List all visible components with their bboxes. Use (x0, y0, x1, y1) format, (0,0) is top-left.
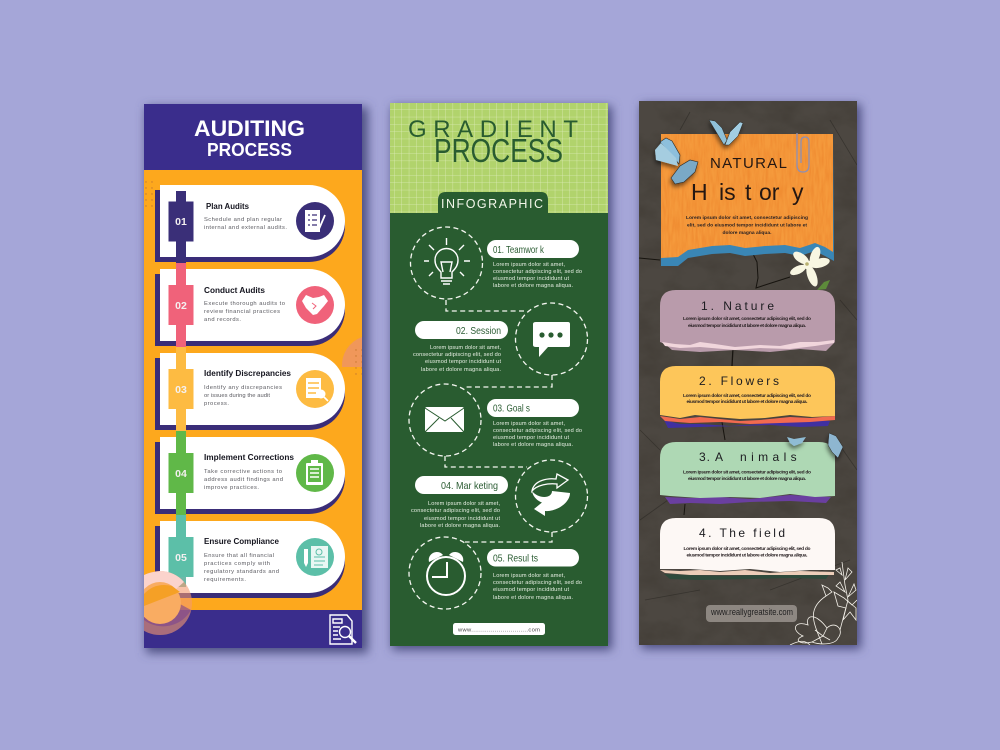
dots decoration (144, 177, 156, 211)
text (493, 573, 582, 601)
step 05 text: requirements. (204, 577, 246, 583)
step 05 (168, 536, 334, 587)
step 01 (168, 201, 334, 242)
website pill: www.............................com (457, 628, 540, 634)
intro text (686, 215, 808, 236)
card 2 (155, 269, 345, 346)
card 3: animals: 3. (699, 450, 711, 464)
card text: eiusmod tempor incididunt ut labore et dolore magna aliqua. (688, 323, 807, 329)
text: consectetur adipiscing elit, sed do (493, 580, 582, 586)
text: labore et dolore magna aliqua. (420, 523, 500, 529)
card 3: animals: A (715, 450, 723, 464)
step 01 text: Schedule and plan regular (204, 217, 282, 223)
step 04 text: improve practices. (204, 485, 259, 491)
stone background (639, 101, 857, 645)
step 04 text: Take corrective actions to (204, 469, 282, 475)
step 01: 01 (175, 216, 187, 228)
card text: Lorem ipsum dolor sit amet, consectetur adipiscing elit, sed do (683, 393, 811, 399)
text (493, 262, 582, 289)
icon: light bulb (424, 238, 470, 284)
text (413, 345, 501, 373)
panel background (144, 104, 362, 648)
step 04: marketing: 04. Mar keting (441, 480, 498, 492)
card text (684, 546, 810, 558)
title (691, 155, 804, 205)
step 03 text: or issues during the audit (204, 393, 270, 399)
step 03: goals (409, 384, 582, 456)
card text: eiusmod tempor incididunt ut labore et dolore magna aliqua. (686, 399, 808, 405)
icon: envelope (425, 407, 464, 432)
text: labore et dolore magna aliqua. (421, 367, 501, 373)
pill (487, 240, 579, 258)
decoration: right semicircle (342, 337, 362, 375)
text: Lorem ipsum dolor sit amet, (428, 501, 500, 507)
text: eiusmod tempor incididunt ut (493, 587, 569, 593)
step 05 text (204, 553, 279, 583)
panel: natural history (639, 101, 861, 649)
infographic tab (438, 192, 548, 213)
step 04 (168, 452, 334, 493)
card text (683, 316, 811, 329)
icon: audit sheet (296, 370, 334, 408)
title: or (759, 179, 780, 205)
card 1: nature (660, 290, 835, 352)
floral outline (790, 562, 857, 645)
deep cracks (639, 252, 790, 515)
text: eiusmod tempor incididunt ut (425, 359, 501, 365)
card text (683, 470, 811, 482)
text: eiusmod tempor incididunt ut (493, 276, 569, 282)
step 02: session: 02. Session (456, 325, 501, 337)
step 05: results (409, 537, 582, 609)
step 04 text (204, 469, 283, 491)
step 01: teamwork: 01. Teamwor k (493, 244, 545, 256)
orange note (661, 134, 834, 266)
step 01: teamwork (410, 227, 582, 299)
step 02 heading: Conduct Audits (204, 285, 265, 295)
pill (415, 476, 508, 494)
card 2: flowers (660, 366, 835, 428)
step 03 heading: Identify Discrepancies (204, 368, 291, 378)
text: labore et dolore magna aliqua. (493, 442, 573, 448)
butterflies on card 3 (787, 433, 843, 458)
step 02 (168, 285, 334, 325)
card 3: animals (660, 442, 835, 504)
website pill: www.reallygreatsite.com (710, 607, 793, 618)
card 5 (155, 521, 345, 598)
text: Lorem ipsum dolor sit amet, (493, 262, 565, 268)
grid header (390, 103, 608, 213)
title (194, 116, 305, 160)
infographic tab: INFOGRAPHIC (441, 197, 543, 211)
step 01 heading: Plan Audits (206, 201, 249, 211)
card text: eiusmod tempor incididunt ut labore et dolore magna aliqua. (686, 552, 808, 558)
card text: eiusmod tempor incididunt ut labore et dolore magna aliqua. (688, 476, 807, 482)
step 01 text: internal and external audits. (204, 225, 287, 231)
title: is (719, 179, 736, 205)
intro text: Lorem ipsum dolor sit amet, consectetur adipiscing (686, 215, 808, 221)
text (493, 421, 582, 448)
step 05: 05 (175, 552, 187, 564)
card 4: the field (660, 518, 835, 580)
step 05 text: Ensure that all financial (204, 553, 274, 559)
heading band (144, 104, 362, 170)
step 04: marketing (411, 460, 588, 532)
card 4: the field: 4. The field (699, 526, 785, 540)
title: AUDITING (194, 116, 305, 141)
icon: alarm clock (427, 552, 465, 595)
panel: gradient process (390, 103, 612, 650)
step 04: 04 (175, 468, 187, 480)
text: Lorem ipsum dolor sit amet, (493, 573, 565, 579)
website pill (706, 605, 797, 622)
step 02 text: Execute thorough audits to (204, 301, 285, 307)
title: y (792, 179, 804, 205)
cracks (640, 112, 857, 600)
step 02: 02 (175, 300, 187, 312)
icon: handshake (296, 286, 334, 324)
icon: leaf (817, 280, 830, 290)
step 02 text (204, 301, 285, 323)
text: eiusmod tempor incididunt ut (493, 435, 569, 441)
step 01 text (204, 217, 287, 231)
step 04 heading: Implement Corrections (204, 452, 294, 462)
card 3 (155, 353, 345, 430)
icon: document and pen (296, 202, 334, 240)
icon: cycle arrows (532, 474, 570, 516)
text: eiusmod tempor incididunt ut (424, 516, 500, 522)
card 4 (155, 437, 345, 514)
icon: chat bubble (533, 322, 570, 357)
text: consectetur adipiscing elit, sed do (493, 269, 582, 275)
step 03: 03 (175, 384, 187, 396)
text: Lorem ipsum dolor sit amet, (493, 421, 565, 427)
pill (487, 549, 579, 566)
title: PROCESS (434, 132, 563, 169)
title: t (745, 179, 752, 205)
card text (683, 393, 811, 405)
footer band (144, 610, 362, 648)
text: labore et dolore magna aliqua. (493, 283, 573, 289)
card text: Lorem ipsum dolor sit amet, consectetur adipiscing elit, sed do (683, 470, 811, 476)
torn edge (662, 340, 834, 350)
card 1 (155, 185, 345, 262)
icon: clipboard (296, 454, 334, 492)
title (408, 116, 578, 169)
step 04 text: address audit findings and (204, 477, 283, 483)
card 2: flowers: 2. Flowers (699, 374, 779, 388)
text: consectetur adipiscing elit, sed do (493, 428, 582, 434)
icon: butterfly top (709, 120, 743, 145)
intro text: dolore magna aliqua. (722, 230, 772, 236)
icon: paperclip (797, 133, 809, 172)
dashed connectors (445, 300, 552, 542)
panel: auditing process (128, 104, 368, 653)
icon: document and pencil (296, 538, 334, 576)
text: labore et dolore magna aliqua. (493, 595, 573, 601)
connector (176, 191, 186, 587)
decoration: bottom-left circles (144, 571, 192, 635)
text: Lorem ipsum dolor sit amet, (430, 345, 501, 351)
step 02: session (413, 303, 588, 375)
intro text: elit, sed do eiusmod tempor incididunt ut labore et (687, 222, 807, 228)
step 03 text (204, 385, 282, 407)
title: GRADIENT (408, 116, 578, 143)
step 03: goals: 03. Goal s (493, 402, 530, 414)
text: consectetur adipiscing elit, sed do (413, 352, 501, 358)
step 05 text: regulatory standards and (204, 569, 279, 575)
text: consectetur adipiscing elit, sed do (411, 508, 500, 514)
step 05 text: practices comply with (204, 561, 270, 567)
card text: Lorem ipsum dolor sit amet, consectetur adipiscing elit, sed do (683, 316, 811, 322)
step 02 text: and records. (204, 317, 241, 323)
card 1: nature: 1. Nature (701, 299, 774, 313)
panel base (390, 103, 608, 646)
text (411, 501, 500, 529)
card 3: animals: nimals (740, 450, 801, 464)
card text: Lorem ipsum dolor sit amet, consectetur adipiscing elit, sed do (684, 546, 810, 552)
icon: report with magnifier (330, 615, 356, 644)
pill (487, 399, 579, 417)
title: NATURAL (710, 155, 787, 172)
step 05 heading: Ensure Compliance (204, 536, 279, 546)
icon: lily (789, 246, 831, 288)
title: H (691, 179, 708, 205)
icon: butterfly left (655, 138, 698, 184)
step 03 text: process. (204, 401, 229, 407)
pill (415, 321, 508, 339)
title: PROCESS (207, 140, 292, 160)
website pill (453, 623, 545, 635)
step 02 text: review financial practices (204, 309, 280, 315)
step 05: results: 05. Resul ts (493, 552, 538, 564)
step 03 (168, 368, 334, 409)
step 03 text: Identify any discrepancies (204, 385, 282, 391)
